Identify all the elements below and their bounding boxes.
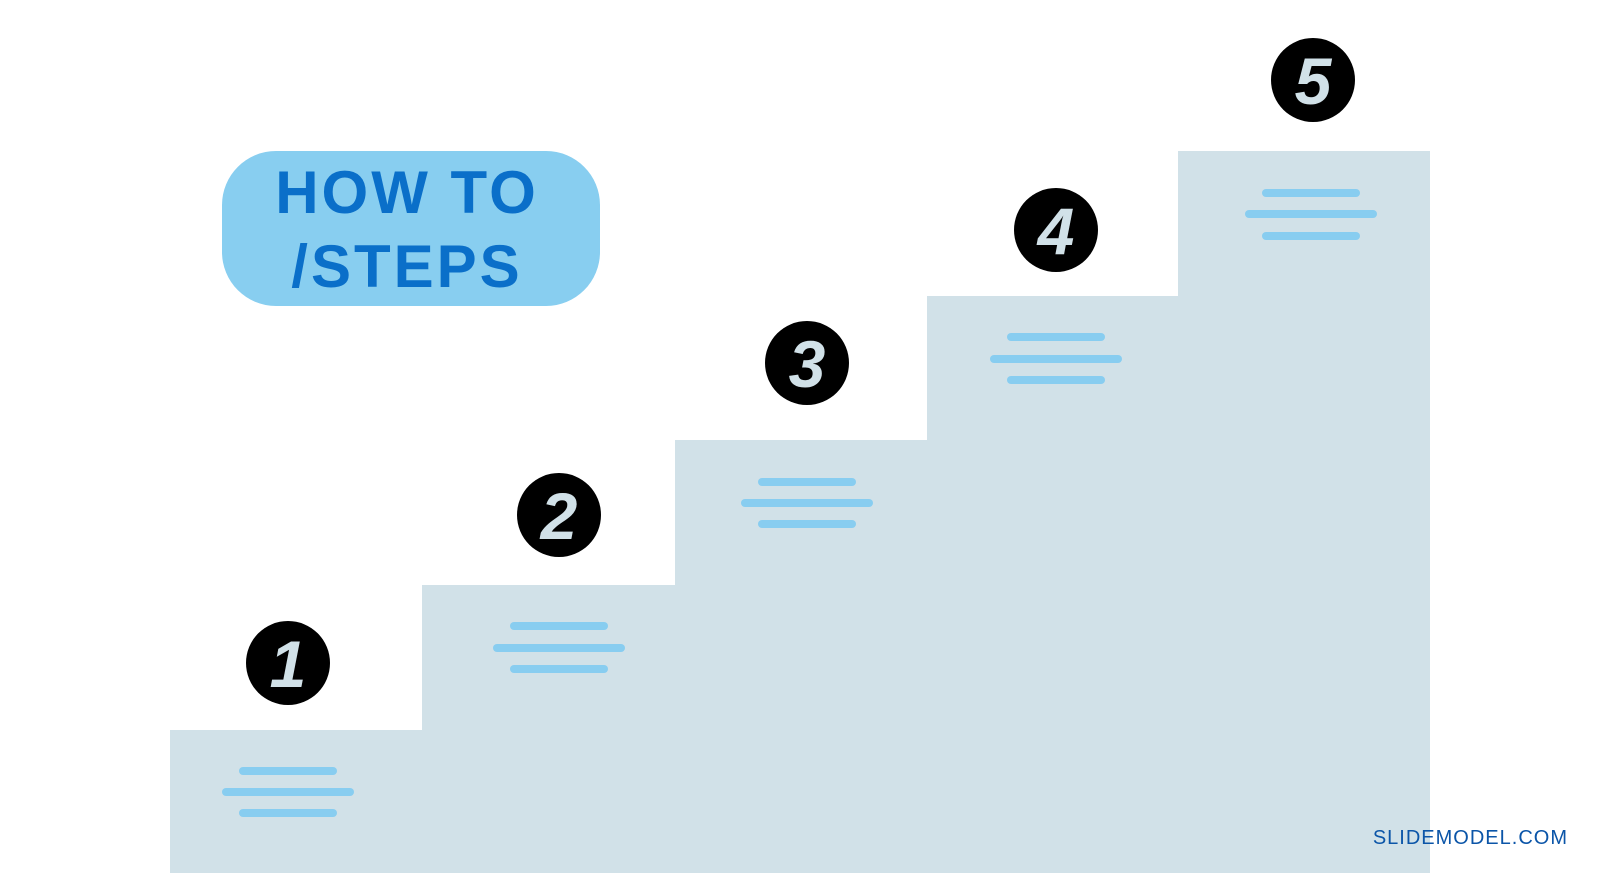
badge 4 (1014, 188, 1098, 272)
badge 3 (765, 321, 849, 405)
step 2 text lines (497, 626, 621, 669)
title box (222, 151, 600, 306)
title box: HOW TO (275, 159, 539, 226)
badge 4: 4 (1036, 194, 1074, 268)
title box: /STEPS (291, 233, 523, 300)
badge 2: 2 (539, 479, 578, 553)
step 3 text lines (745, 482, 869, 524)
badge 5: 5 (1295, 44, 1333, 118)
step 4 text lines (994, 337, 1118, 380)
badge 3: 3 (789, 327, 825, 401)
staircase (170, 151, 1430, 873)
step 1 text lines (226, 771, 350, 813)
step 5 text lines (1249, 193, 1373, 236)
badge 1 (246, 621, 330, 705)
badge 1: 1 (270, 627, 306, 701)
badge 5 (1271, 38, 1355, 122)
badge 2 (517, 473, 601, 557)
watermark: SLIDEMODEL.COM (1373, 827, 1568, 849)
